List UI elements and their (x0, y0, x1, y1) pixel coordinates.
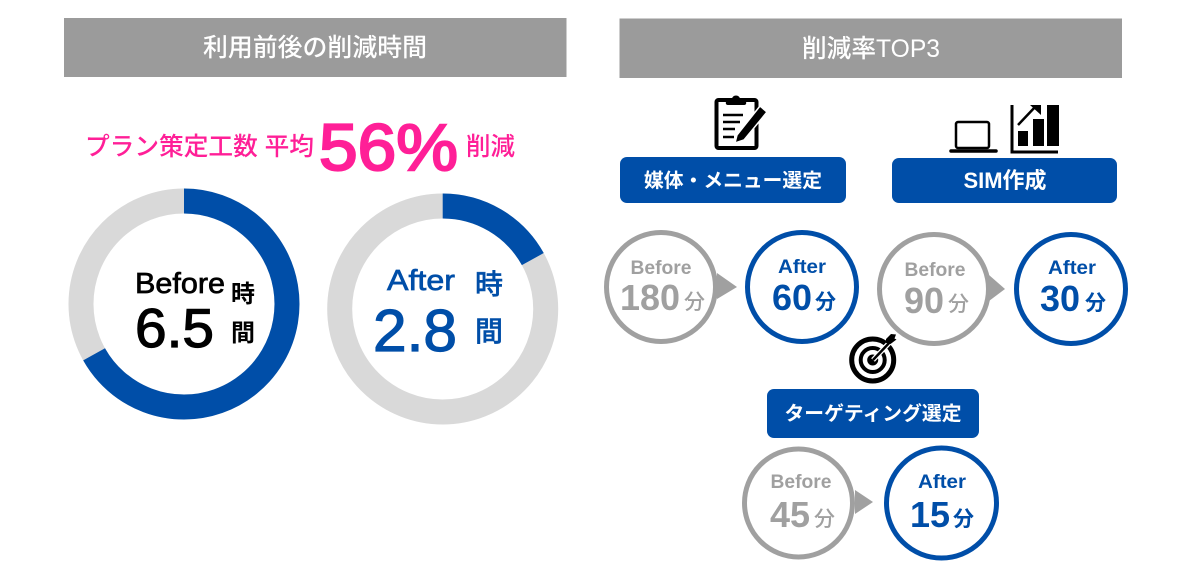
badge: media and menu selection: 媒体・メニュー選定 (644, 170, 822, 192)
circle: after 30: 30 (1040, 278, 1080, 319)
circle: after 60: After (778, 257, 827, 278)
donut chart: before (81, 201, 287, 407)
heading: right panel: 削減率TOP3 (802, 35, 940, 63)
heading: left panel: 利用前後の削減時間 (203, 34, 427, 62)
arrow (989, 275, 1005, 301)
badge: targeting selection: ターゲティング選定 (784, 402, 962, 425)
donut chart: after: 間 (475, 316, 503, 347)
circle: before 180 (606, 232, 716, 342)
callout: average reduction: 56% (319, 110, 458, 184)
donut chart: after (340, 206, 546, 412)
badge: targeting selection (767, 389, 979, 438)
donut chart: before: 時 (231, 281, 255, 308)
callout: average reduction (85, 110, 515, 184)
icon: clipboard with pen (716, 96, 767, 148)
icon: laptop (951, 122, 996, 151)
circle: after 30: After (1048, 258, 1097, 279)
circle: before 90 (880, 234, 988, 344)
circle: before 90: Before (904, 260, 966, 281)
circle: after 60 (748, 232, 856, 342)
circle: after 15: 15 (910, 494, 950, 535)
donut chart: after: 2.8 (373, 298, 457, 364)
badge: SIM creation (892, 158, 1117, 203)
circle: before 180: 分 (684, 291, 705, 314)
callout: average reduction: プラン策定工数 平均 (85, 133, 314, 161)
circle: after 15: 分 (953, 508, 974, 531)
circle: before 180: Before (630, 258, 692, 279)
circle: before 180: 180 (620, 277, 680, 318)
heading: left panel (64, 18, 566, 77)
icon: target with arrow (852, 334, 896, 381)
donut chart: before: 6.5 (135, 297, 214, 359)
circle: after 30: 分 (1085, 292, 1106, 315)
icon: bar chart (1012, 105, 1059, 152)
heading: right panel (620, 18, 1122, 78)
circle: after 60: 60 (772, 277, 812, 318)
donut chart: after: 時 (475, 269, 503, 300)
donut chart: before: 間 (231, 320, 255, 347)
circle: before 45: 45 (770, 494, 810, 535)
circle: before 45: 分 (814, 508, 835, 531)
circle: before 90: 分 (948, 293, 969, 316)
circle: after 15 (886, 448, 996, 558)
callout: average reduction: 削減 (466, 133, 515, 161)
comparison: 45 to 15 minutes (744, 448, 996, 558)
circle: after 30 (1016, 234, 1126, 344)
badge: SIM creation: SIM作成 (964, 168, 1046, 193)
comparison: 180 to 60 minutes (606, 232, 856, 342)
circle: before 90: 90 (904, 280, 944, 321)
arrow (717, 273, 737, 299)
comparison: 90 to 30 minutes (880, 234, 1126, 344)
arrow (855, 490, 873, 514)
circle: before 45: Before (770, 472, 832, 493)
circle: after 60: 分 (815, 291, 836, 314)
badge: media and menu selection (620, 157, 846, 203)
donut chart: before: Before (135, 268, 225, 300)
circle: before 45 (744, 449, 852, 557)
donut chart: after: After (387, 265, 455, 297)
circle: after 15: After (918, 472, 967, 493)
